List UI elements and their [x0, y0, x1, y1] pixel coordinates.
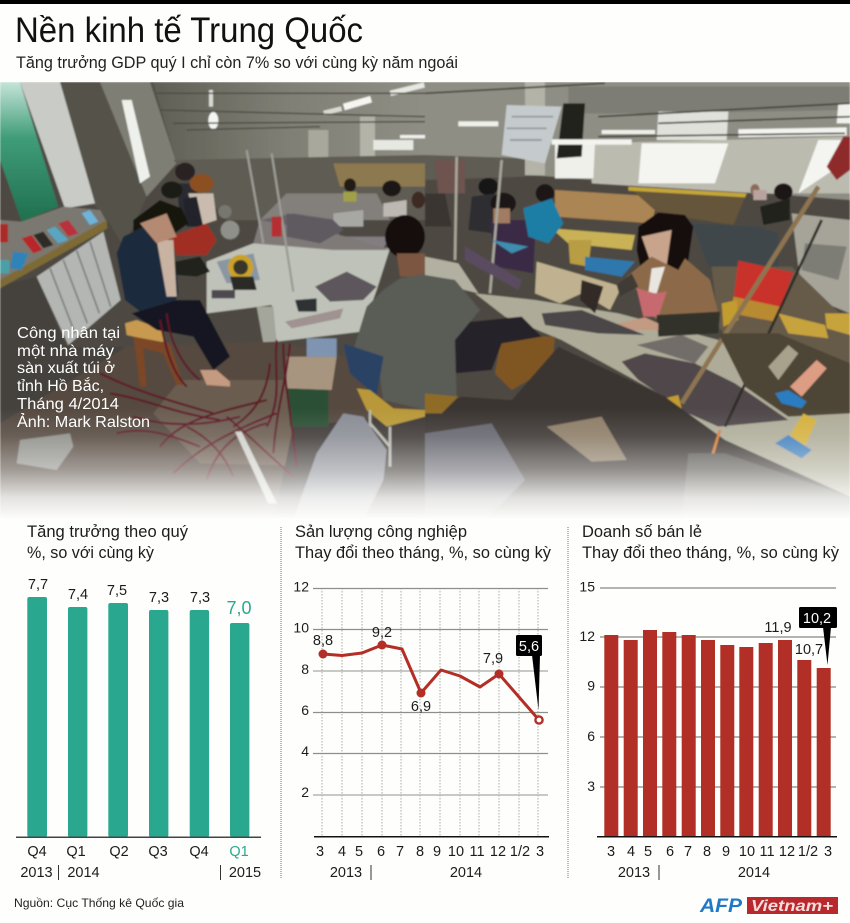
y axis labels [293, 578, 309, 800]
line chart: industrial output [313, 588, 549, 838]
panel: retail sales [579, 523, 840, 881]
y axis labels: 4 [301, 743, 309, 759]
x axis labels: 2013 [330, 865, 362, 881]
x axis labels: 2013 [618, 865, 650, 881]
x axis labels: 3 [824, 844, 832, 860]
value labels: 7,3 [190, 590, 210, 606]
x axis labels: 8 [416, 844, 424, 860]
x axis labels: 5 [355, 844, 363, 860]
y axis labels: 12 [293, 578, 309, 594]
x axis labels: 8 [703, 844, 711, 860]
x axis labels: 4 [627, 844, 635, 860]
axis labels [20, 844, 261, 881]
x axis labels: 5 [644, 844, 652, 860]
photo caption: Công nhân tại [17, 325, 120, 342]
heading: industrial output: Thay đổi theo tháng, %, so cùng kỳ [295, 544, 552, 562]
logo: Vietnam+: Vietnam+ [751, 898, 833, 915]
x axis labels [607, 844, 832, 881]
photo caption [17, 325, 150, 431]
top bar [0, 0, 850, 4]
fade overlay [0, 408, 850, 520]
sewing machine [535, 262, 622, 310]
back workers [425, 160, 793, 273]
axis labels: Q4 [27, 844, 47, 860]
x axis labels: 11 [469, 844, 485, 860]
x axis labels [316, 844, 544, 881]
value labels: 7,5 [107, 583, 127, 599]
y axis labels: 10 [293, 620, 309, 636]
value labels: 9,2 [372, 625, 392, 641]
axis labels: Q4 [189, 844, 209, 860]
x axis labels: 2014 [738, 865, 770, 881]
axis labels: Q1 [229, 844, 249, 860]
y axis labels: 3 [587, 778, 595, 794]
divider left [280, 527, 282, 878]
x axis labels: 6 [377, 844, 385, 860]
x axis labels: 10 [739, 844, 755, 860]
spools right [768, 345, 827, 458]
photo caption: tỉnh Hồ Bắc, [17, 376, 104, 395]
value labels: 7,4 [68, 587, 88, 603]
y axis labels: 8 [301, 661, 309, 677]
woman in tan jacket [617, 212, 720, 337]
axis labels: 2013 [20, 865, 53, 881]
value labels: 7,3 [149, 590, 169, 606]
baseline [16, 836, 261, 838]
value labels: 7,9 [483, 651, 503, 667]
whiteboard [502, 105, 562, 163]
x axis labels: 1/2 [798, 844, 818, 860]
heading: industrial output: Sản lượng công nghiệp [295, 523, 467, 541]
x axis labels: 3 [536, 844, 544, 860]
y axis labels [579, 578, 595, 794]
subtitle: Tăng trưởng GDP quý I chỉ còn 7% so với cùng kỳ năm ngoái [16, 53, 458, 72]
axis labels: 2014 [67, 865, 100, 881]
y axis labels: 9 [587, 678, 595, 694]
photo caption: Tháng 4/2014 [17, 396, 119, 413]
heading: quarterly growth [27, 523, 189, 562]
heading: retail sales [582, 523, 840, 562]
man shoulder and box [495, 337, 555, 390]
woman sewing [117, 200, 230, 387]
y axis labels: 6 [587, 728, 595, 744]
photo caption: sàn xuất túi ở [17, 360, 116, 377]
cloth on table [542, 310, 645, 335]
axis labels: Q3 [148, 844, 168, 860]
x axis labels: 1/2 [510, 844, 530, 860]
heading: retail sales: Thay đổi theo tháng, %, so cùng kỳ [582, 544, 840, 562]
pole [682, 187, 818, 403]
bar chart: retail sales [597, 588, 837, 838]
title: Nền kinh tế Trung Quốc [15, 11, 363, 50]
callout: 10,2: 10,2 [803, 611, 831, 627]
photo right half [425, 82, 850, 520]
bucket [733, 260, 794, 308]
value labels: 7,0 [226, 598, 252, 618]
floor [425, 347, 814, 482]
y axis labels: 15 [579, 578, 595, 594]
source: Nguồn: Cục Thống kê Quốc gia [14, 896, 184, 910]
photo caption: một nhà máy [17, 343, 114, 360]
heading: quarterly growth: %, so với cùng kỳ [27, 544, 155, 562]
dark bench contents [718, 333, 850, 417]
spools on sill [0, 210, 98, 273]
x axis labels: 12 [779, 844, 795, 860]
x axis labels: 7 [684, 844, 692, 860]
x axis labels: 9 [433, 844, 441, 860]
axis labels: 2015 [229, 865, 261, 881]
panel: quarterly growth [16, 523, 261, 881]
x axis labels: 11 [759, 844, 775, 860]
logo: AFP: AFP [699, 896, 742, 917]
yellow rags [666, 394, 682, 410]
x axis labels: 7 [396, 844, 404, 860]
value labels: 7,7 [28, 577, 48, 593]
x axis labels: 10 [448, 844, 464, 860]
axis labels: Q1 [66, 844, 86, 860]
red cords [100, 313, 297, 480]
y axis labels: 12 [579, 628, 595, 644]
value labels [764, 620, 823, 658]
value labels: 6,9 [411, 699, 431, 715]
callout: 5,6: 5,6 [519, 639, 539, 655]
far cloth piles [264, 213, 340, 236]
y axis labels: 6 [301, 702, 309, 718]
y axis labels: 2 [301, 784, 309, 800]
value labels: 10,7 [795, 642, 823, 658]
heading: quarterly growth: Tăng trưởng theo quý [27, 523, 189, 541]
x axis labels: 3 [607, 844, 615, 860]
back benches [425, 176, 692, 256]
photo left half [0, 82, 425, 520]
x axis labels: 3 [316, 844, 324, 860]
right bench and pole [792, 213, 850, 313]
man back view [343, 215, 425, 467]
bar chart: quarterly growth [27, 597, 249, 837]
value labels: 8,8 [313, 633, 333, 649]
divider right [567, 527, 569, 878]
x axis labels: 6 [666, 844, 674, 860]
tables [207, 243, 390, 342]
x axis labels: 12 [490, 844, 506, 860]
callout: 5,6 [516, 635, 542, 710]
photo caption: Ảnh: Mark Ralston [17, 412, 150, 431]
worker front table [475, 293, 850, 497]
table leg and floor [256, 306, 277, 343]
stool [125, 320, 183, 387]
radiator and sill [1, 289, 2, 420]
value labels: 11,9 [764, 620, 792, 636]
heading: retail sales: Doanh số bán lẻ [582, 523, 702, 541]
value labels [28, 577, 252, 618]
photo: factory workers [0, 82, 850, 520]
far workers [175, 163, 195, 181]
value labels [313, 625, 503, 715]
callout: 10,2 [799, 607, 837, 665]
panel: industrial output [293, 523, 552, 881]
x axis labels: 4 [338, 844, 346, 860]
x axis labels: 9 [722, 844, 730, 860]
x axis labels: 2014 [450, 865, 482, 881]
heading: industrial output [295, 523, 552, 562]
axis labels: Q2 [109, 844, 129, 860]
